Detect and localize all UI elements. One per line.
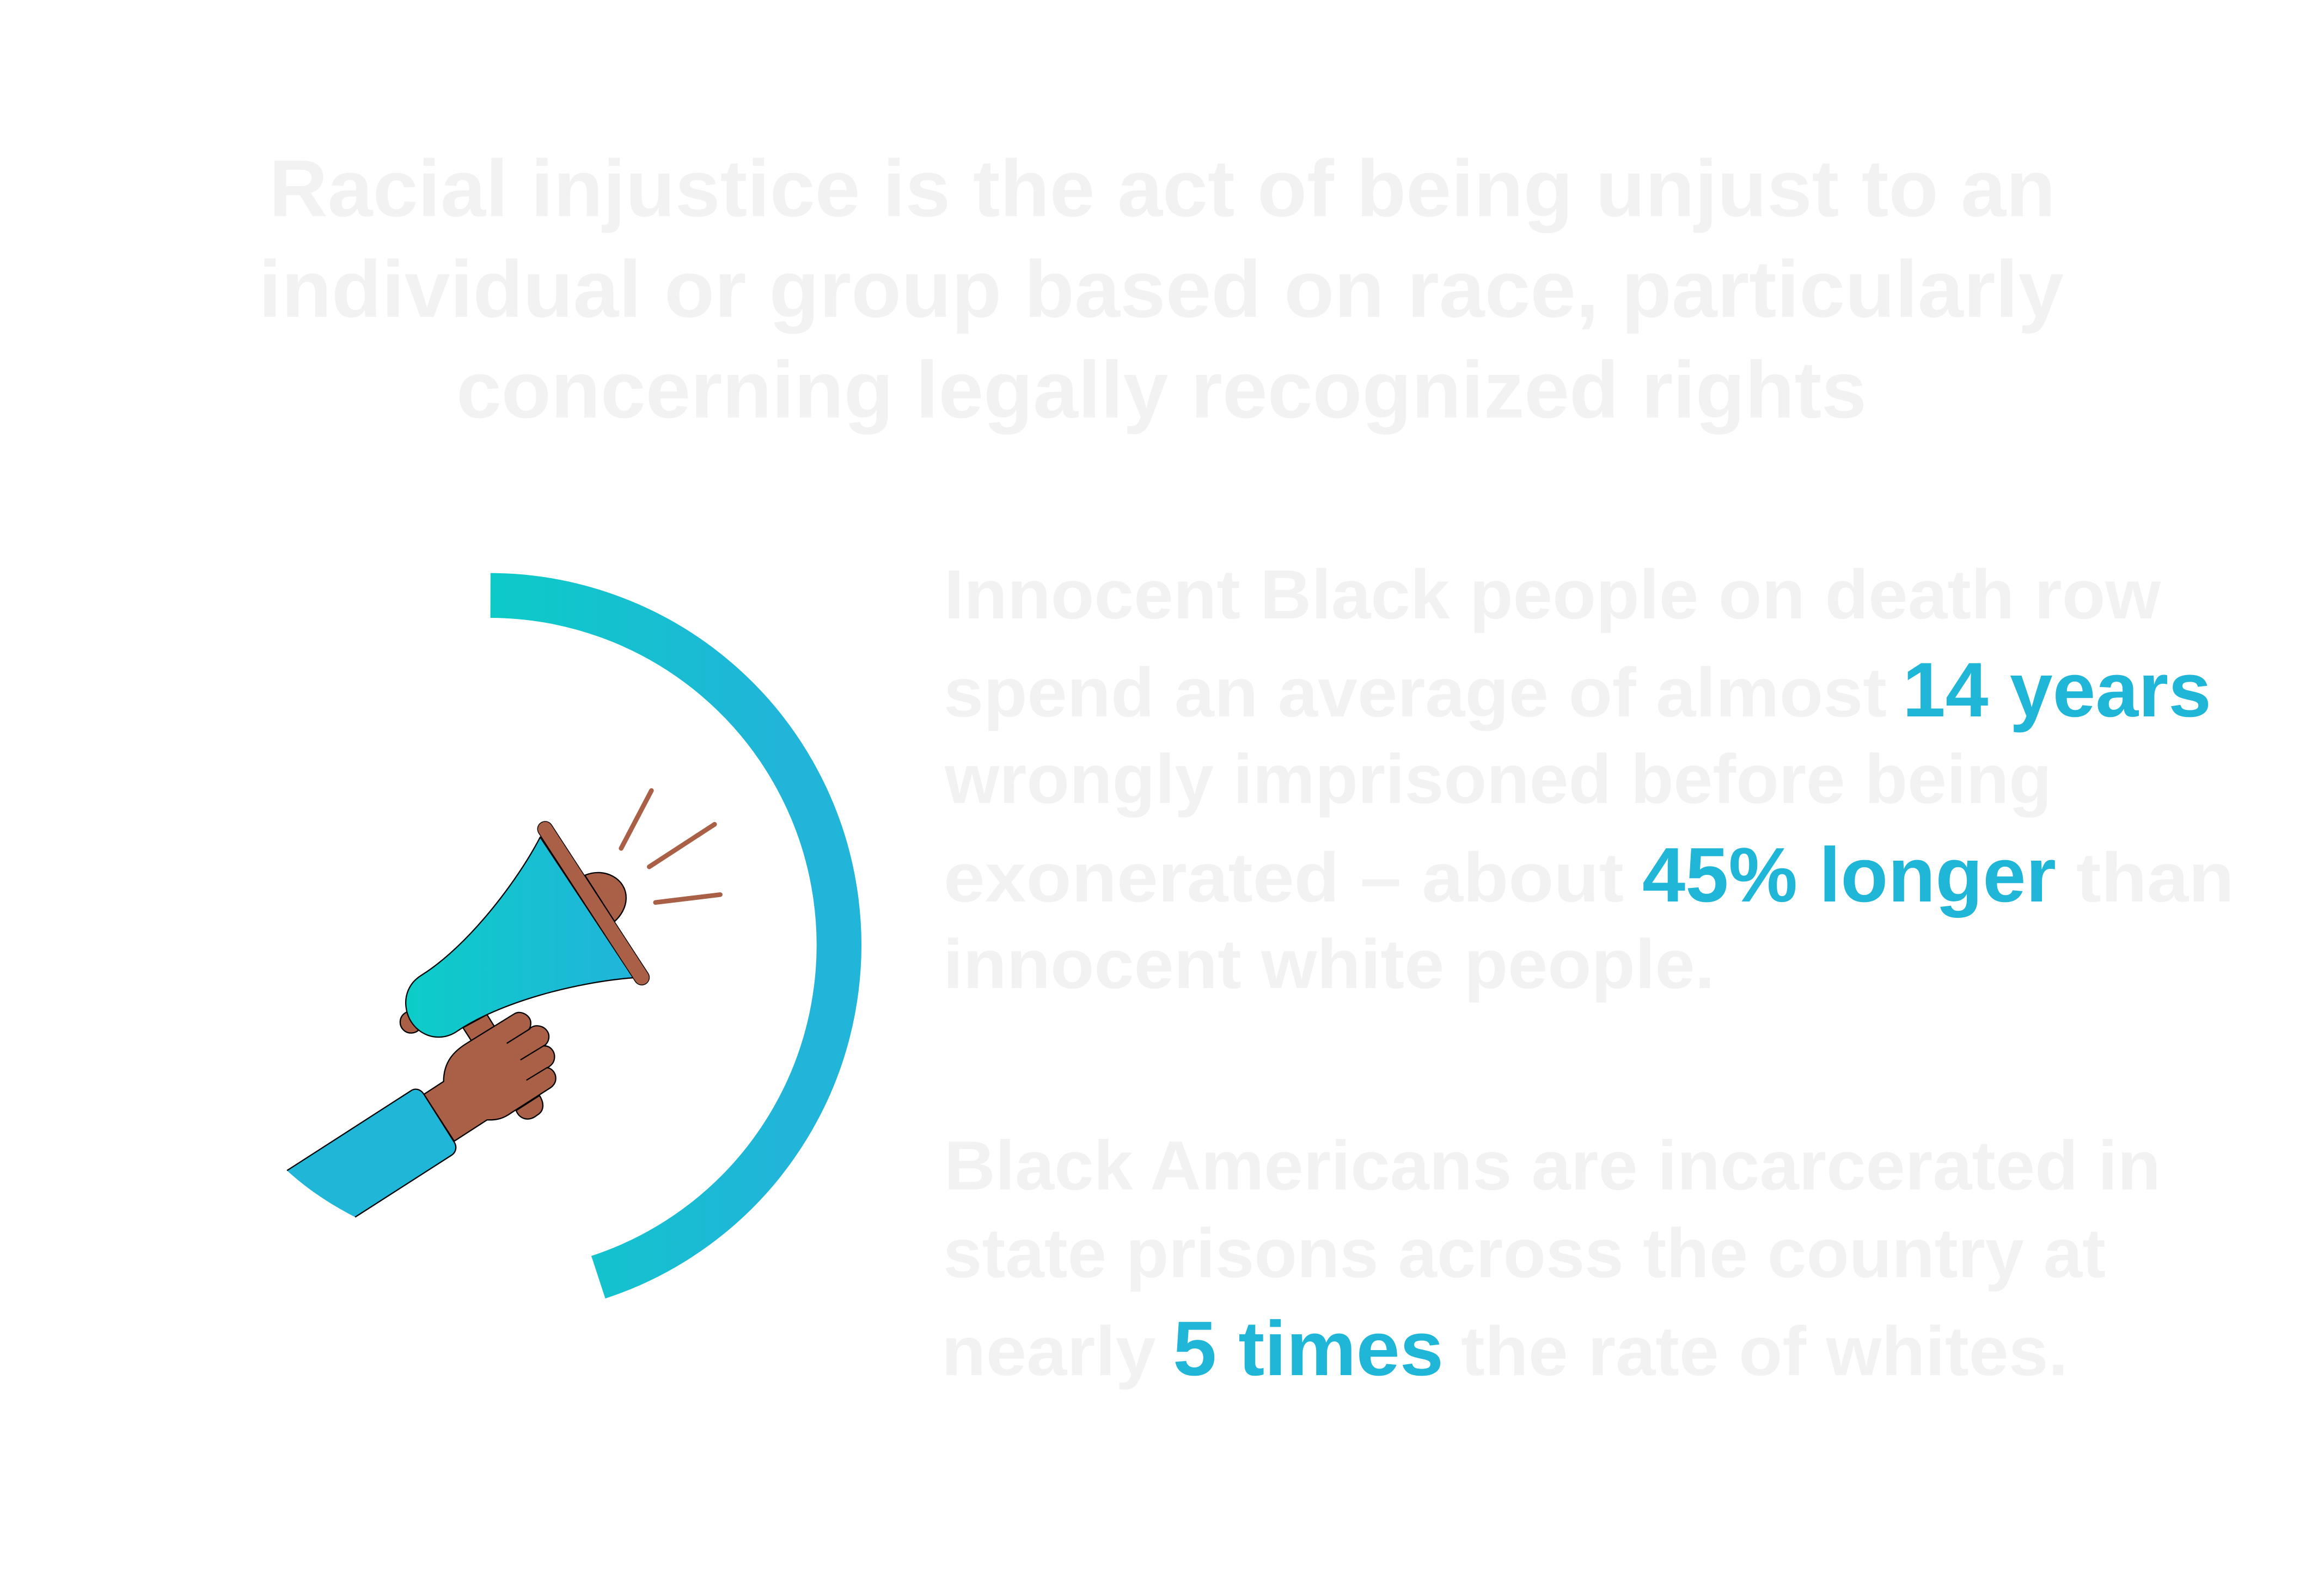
- icon: hand holding megaphone: [287, 790, 720, 1217]
- sound lines: [621, 790, 720, 903]
- megaphone rear knob: [400, 1011, 422, 1033]
- heading: Racial injustice is the act of being unjust to an: [269, 144, 2056, 234]
- text block: death row: than: [2076, 839, 2234, 917]
- text block: death row: Innocent Black people on death row: [944, 556, 2161, 634]
- thumb: [516, 1095, 543, 1119]
- sleeve: [287, 1089, 456, 1217]
- highlight: 45% longer: 45% longer: [1642, 832, 2056, 918]
- heading: [259, 144, 2064, 435]
- hand: [424, 1013, 556, 1141]
- text block: incarceration: the rate of whites.: [1461, 1313, 2068, 1390]
- megaphone horn: [406, 837, 633, 1037]
- text block: incarceration: nearly: [941, 1313, 1156, 1390]
- text block: death row: spend an average of almost: [944, 654, 1887, 732]
- text block: incarceration: state prisons across the country at: [943, 1215, 2106, 1292]
- text block: death row: [943, 556, 2234, 1003]
- text block: death row: exonerated – about: [944, 839, 1624, 917]
- text block: death row: wrongly imprisoned before being: [944, 740, 2052, 818]
- megaphone rim: [545, 829, 642, 977]
- megaphone dome: [585, 873, 626, 922]
- text block: incarceration: Black Americans are incarcerated in: [944, 1127, 2161, 1205]
- text block: incarceration: [941, 1127, 2161, 1392]
- highlight: 5 times: 5 times: [1173, 1305, 1444, 1392]
- text block: death row: innocent white people.: [943, 925, 1715, 1003]
- heading: concerning legally recognized rights: [456, 345, 1867, 435]
- megaphone handle: [463, 1015, 495, 1041]
- highlight: 14 years: 14 years: [1903, 647, 2211, 733]
- circular arc ring: [491, 596, 839, 1277]
- heading: individual or group based on race, particularly: [259, 244, 2064, 334]
